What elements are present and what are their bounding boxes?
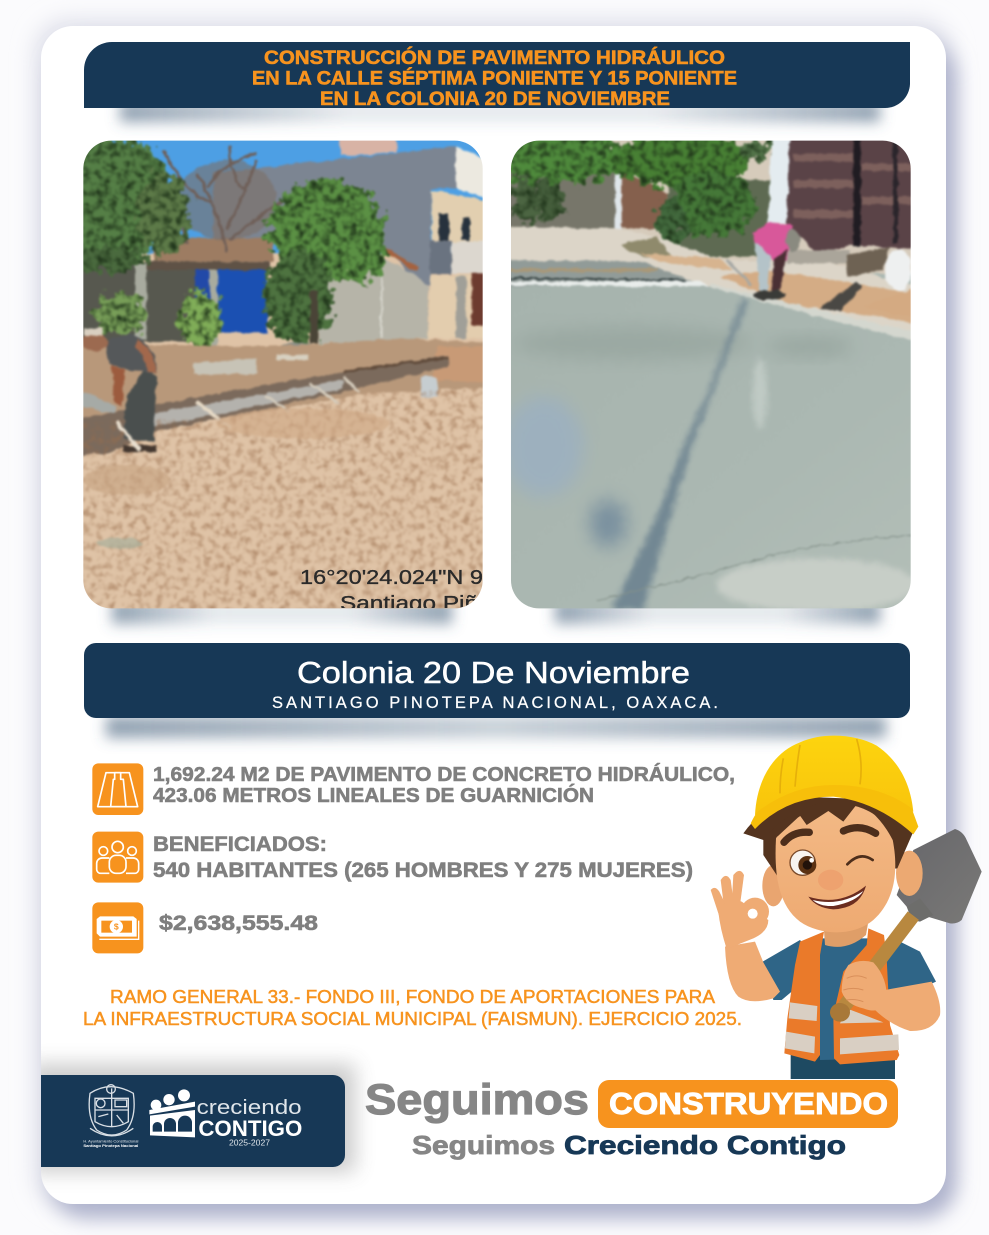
metric: pavement and curb lengths xyxy=(153,763,735,807)
face xyxy=(776,805,895,932)
helmet xyxy=(751,736,918,834)
slogan: seguimos creciendo contigo: Creciendo Contigo xyxy=(564,1130,846,1160)
photo shadows xyxy=(112,600,880,624)
photo: fresh hydraulic concrete street xyxy=(511,140,911,608)
raised arm xyxy=(725,942,780,1001)
eyebrows xyxy=(784,828,876,842)
icon: money xyxy=(92,902,143,953)
icon: road xyxy=(92,763,143,815)
funding source text: LA INFRAESTRUCTURA SOCIAL MUNICIPAL (FAISMUN). EJERCICIO 2025. xyxy=(83,1008,742,1029)
icon: money: $ xyxy=(114,922,119,932)
funding source text: RAMO GENERAL 33.- FONDO III, FONDO DE APORTACIONES PARA xyxy=(110,986,716,1007)
back hair and ears xyxy=(743,797,923,906)
creciendo contigo logo: CONTIGO xyxy=(198,1116,302,1141)
open eye xyxy=(790,850,816,875)
gripping hand xyxy=(842,961,887,1011)
photo timestamp text: 16°20'24.024"N 9 xyxy=(300,567,483,589)
pants xyxy=(791,1055,895,1079)
creciendo contigo logo: 2025-2027 xyxy=(229,1139,271,1148)
photo: rebar and formwork on dirt street xyxy=(83,140,483,608)
logo panel xyxy=(30,1064,355,1172)
slogan: seguimos creciendo contigo: Seguimos xyxy=(412,1130,555,1160)
worker xyxy=(727,223,801,300)
municipal crest: H. Ayuntamiento Constitucional xyxy=(83,1140,139,1144)
smile xyxy=(808,886,866,909)
location banner xyxy=(84,643,910,738)
metric: beneficiaries xyxy=(153,832,693,882)
right forearm xyxy=(873,982,940,1031)
metric: beneficiaries: BENEFICIADOS: xyxy=(153,832,327,856)
metric: beneficiaries: 540 HABITANTES (265 HOMBRES Y 275 MUJERES) xyxy=(153,858,693,882)
location heading: Colonia 20 De Noviembre xyxy=(297,655,690,690)
safety vest xyxy=(784,928,899,1064)
neck xyxy=(823,922,868,947)
photo timestamp text: Santiago Piñ xyxy=(340,593,478,615)
vest reflective stripes xyxy=(785,1002,899,1054)
ok hand xyxy=(711,871,769,949)
shirt and sleeves xyxy=(763,938,936,1060)
shovel handle xyxy=(841,916,913,1011)
icon: people xyxy=(92,832,143,883)
slogan: seguimos creciendo contigo xyxy=(412,1130,846,1160)
location subheading: SANTIAGO PINOTEPA NACIONAL, OAXACA. xyxy=(272,694,718,712)
photo timestamp text xyxy=(302,570,482,608)
title text xyxy=(252,45,737,110)
header banner xyxy=(84,42,910,122)
worker xyxy=(82,328,157,452)
slogan badge: construyendo: CONSTRUYENDO xyxy=(609,1086,888,1121)
winking eye xyxy=(847,856,873,864)
slogan: seguimos: Seguimos xyxy=(365,1076,589,1124)
mascot: construction worker boy xyxy=(711,736,982,1079)
funding source text xyxy=(83,986,742,1029)
title text: EN LA COLONIA 20 DE NOVIEMBRE xyxy=(320,88,670,110)
creciendo contigo logo xyxy=(149,1089,302,1148)
title text: EN LA CALLE SÉPTIMA PONIENTE Y 15 PONIENTE xyxy=(252,66,737,90)
municipal crest: Santiago Pinotepa Nacional xyxy=(83,1144,138,1148)
metric: pavement and curb lengths: 1,692.24 M2 DE PAVIMENTO DE CONCRETO HIDRÁULICO, xyxy=(153,763,735,786)
creciendo contigo logo: creciendo xyxy=(197,1096,302,1119)
municipal crest xyxy=(83,1085,139,1148)
metric: investment amount: $2,638,555.48 xyxy=(159,911,318,935)
fringe xyxy=(768,798,900,840)
slogan badge: construyendo xyxy=(598,1080,898,1128)
title text: CONSTRUCCIÓN DE PAVIMENTO HIDRÁULICO xyxy=(264,45,725,69)
metric: pavement and curb lengths: 423.06 METROS LINEALES DE GUARNICIÓN xyxy=(153,783,594,807)
nose xyxy=(818,870,843,890)
shovel xyxy=(897,829,982,924)
